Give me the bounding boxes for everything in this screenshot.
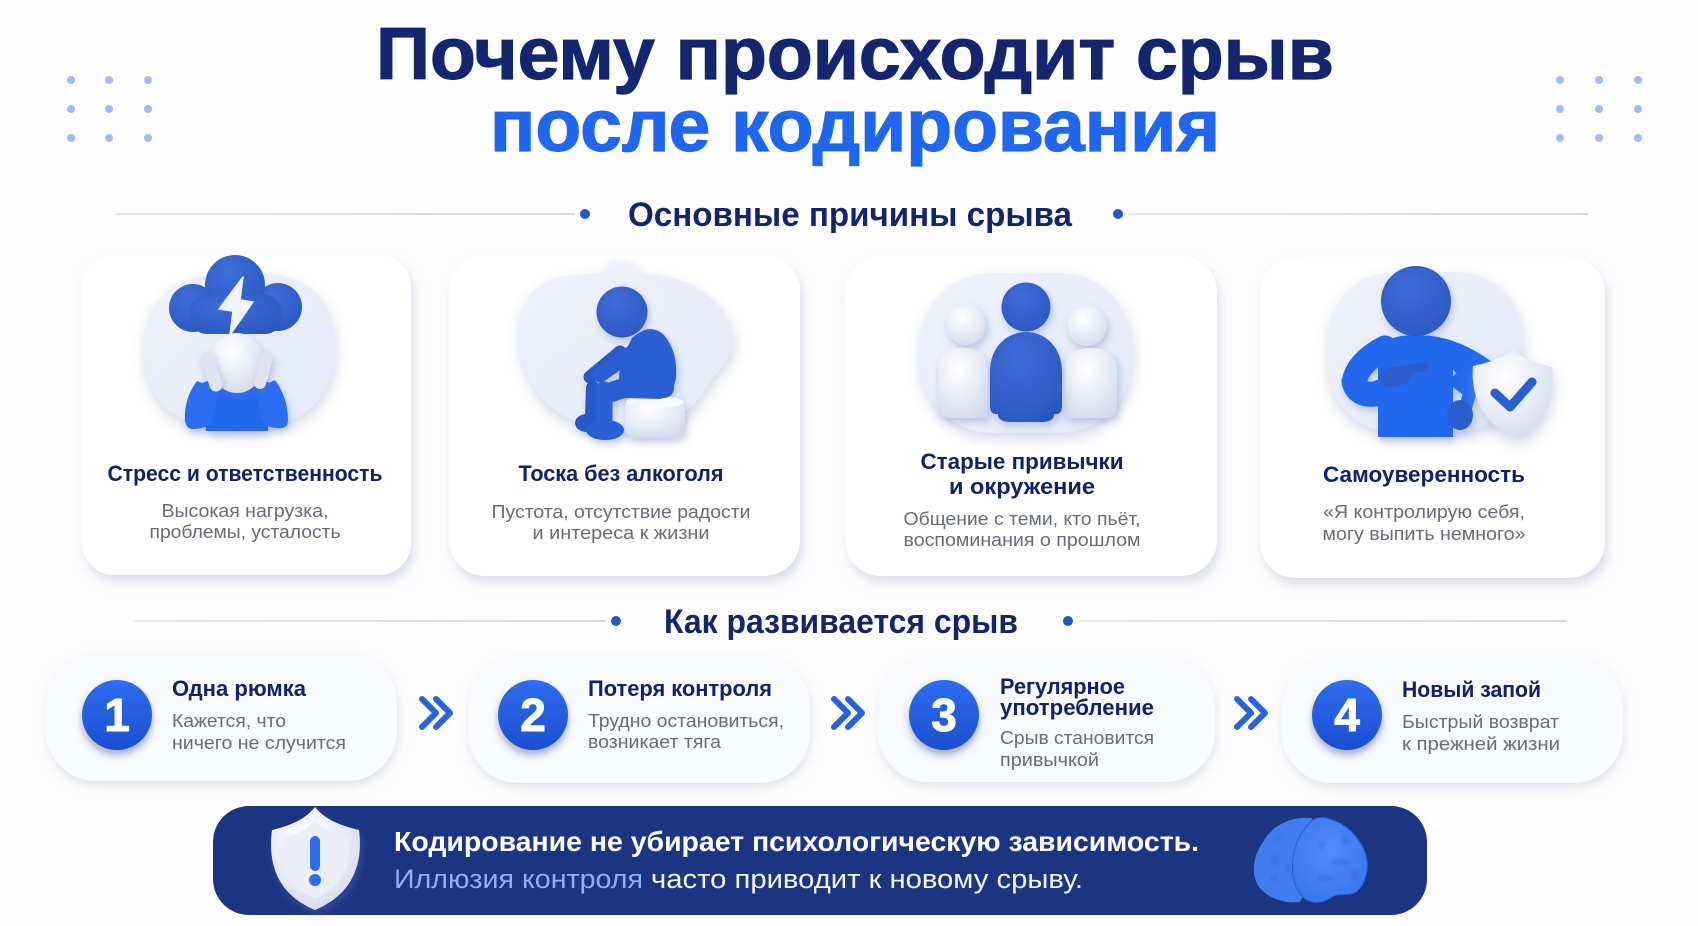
number badge: 1 <box>104 689 130 741</box>
step text <box>172 676 346 753</box>
card description: могу выпить немного» <box>1322 524 1526 544</box>
callout text <box>394 826 1199 894</box>
step text: Трудно остановиться, <box>588 711 784 731</box>
panel: longing <box>449 255 800 576</box>
step text <box>1402 677 1560 754</box>
icon: warning shield <box>271 807 360 910</box>
step text: употребление <box>1000 695 1154 720</box>
step text: возникает тяга <box>588 732 722 752</box>
icon: sad seated figure <box>519 259 733 440</box>
icon: stressed person under a storm cloud <box>144 255 335 431</box>
step text: Новый запой <box>1402 677 1541 702</box>
arrow 3 <box>1237 699 1265 727</box>
icon: brain <box>1254 818 1367 902</box>
decorative dots: right <box>1556 76 1642 142</box>
callout text: Кодирование не убирает психологическую зависимость. <box>394 826 1199 857</box>
card description <box>492 502 750 543</box>
panel: stress <box>82 255 411 575</box>
card title: Старые привычки <box>920 449 1124 474</box>
icon: confident person with shield <box>1328 266 1553 439</box>
section heading: causes: Основные причины срыва <box>628 196 1073 234</box>
card description <box>904 509 1140 550</box>
number badge: 2 <box>520 689 546 741</box>
section heading: causes <box>116 196 1588 234</box>
title <box>376 14 1334 167</box>
card description: и интереса к жизни <box>532 523 710 543</box>
step 4 <box>1282 657 1623 783</box>
title: Почему происходит срыв <box>376 14 1334 95</box>
arrow 1 <box>422 699 450 727</box>
callout text: Иллюзия контроля <box>394 864 643 894</box>
icon: group of people <box>920 273 1132 433</box>
title: после кодирования <box>490 86 1220 167</box>
number badge <box>82 680 152 750</box>
card title: Стресс и ответственность <box>108 461 382 486</box>
step text: Кажется, что <box>172 711 286 731</box>
step text <box>588 676 784 752</box>
card title <box>920 449 1124 499</box>
step text: Срыв становится <box>1000 728 1154 748</box>
number badge <box>498 680 568 750</box>
card title: Тоска без алкоголя <box>518 461 724 486</box>
number badge <box>1312 680 1382 750</box>
step text: Одна рюмка <box>172 676 307 701</box>
step text: Регулярное <box>1000 674 1125 699</box>
card title: и окружение <box>949 474 1095 499</box>
panel: old habits <box>845 256 1217 576</box>
step 3 <box>878 657 1215 782</box>
step 1 <box>46 653 397 781</box>
card description: «Я контролирую себя, <box>1323 502 1525 522</box>
section heading: progression <box>134 603 1567 641</box>
step text: ничего не случится <box>172 733 346 753</box>
card title: Самоуверенность <box>1323 462 1525 487</box>
arrow 2 <box>834 699 862 727</box>
step text: привычкой <box>1000 750 1099 770</box>
decorative dots: left <box>67 76 152 142</box>
step text: Потеря контроля <box>588 676 772 701</box>
step text <box>1000 674 1154 770</box>
card description: воспоминания о прошлом <box>904 530 1140 550</box>
card description: Общение с теми, кто пьёт, <box>904 509 1140 529</box>
callout banner <box>213 806 1427 915</box>
callout text: часто приводит к новому срыву. <box>651 864 1083 894</box>
card description: Высокая нагрузка, <box>162 501 328 521</box>
step 2 <box>468 656 810 783</box>
card description: проблемы, усталость <box>150 522 340 542</box>
section heading: progression: Как развивается срыв <box>664 603 1018 641</box>
step text: к прежней жизни <box>1402 734 1560 754</box>
panel: self-confidence <box>1260 257 1605 578</box>
number badge: 4 <box>1334 689 1360 741</box>
card description: Пустота, отсутствие радости <box>492 502 750 522</box>
number badge <box>909 680 979 750</box>
card description <box>1322 502 1526 544</box>
step text: Быстрый возврат <box>1402 712 1559 732</box>
number badge: 3 <box>931 689 957 741</box>
card description <box>150 501 340 542</box>
